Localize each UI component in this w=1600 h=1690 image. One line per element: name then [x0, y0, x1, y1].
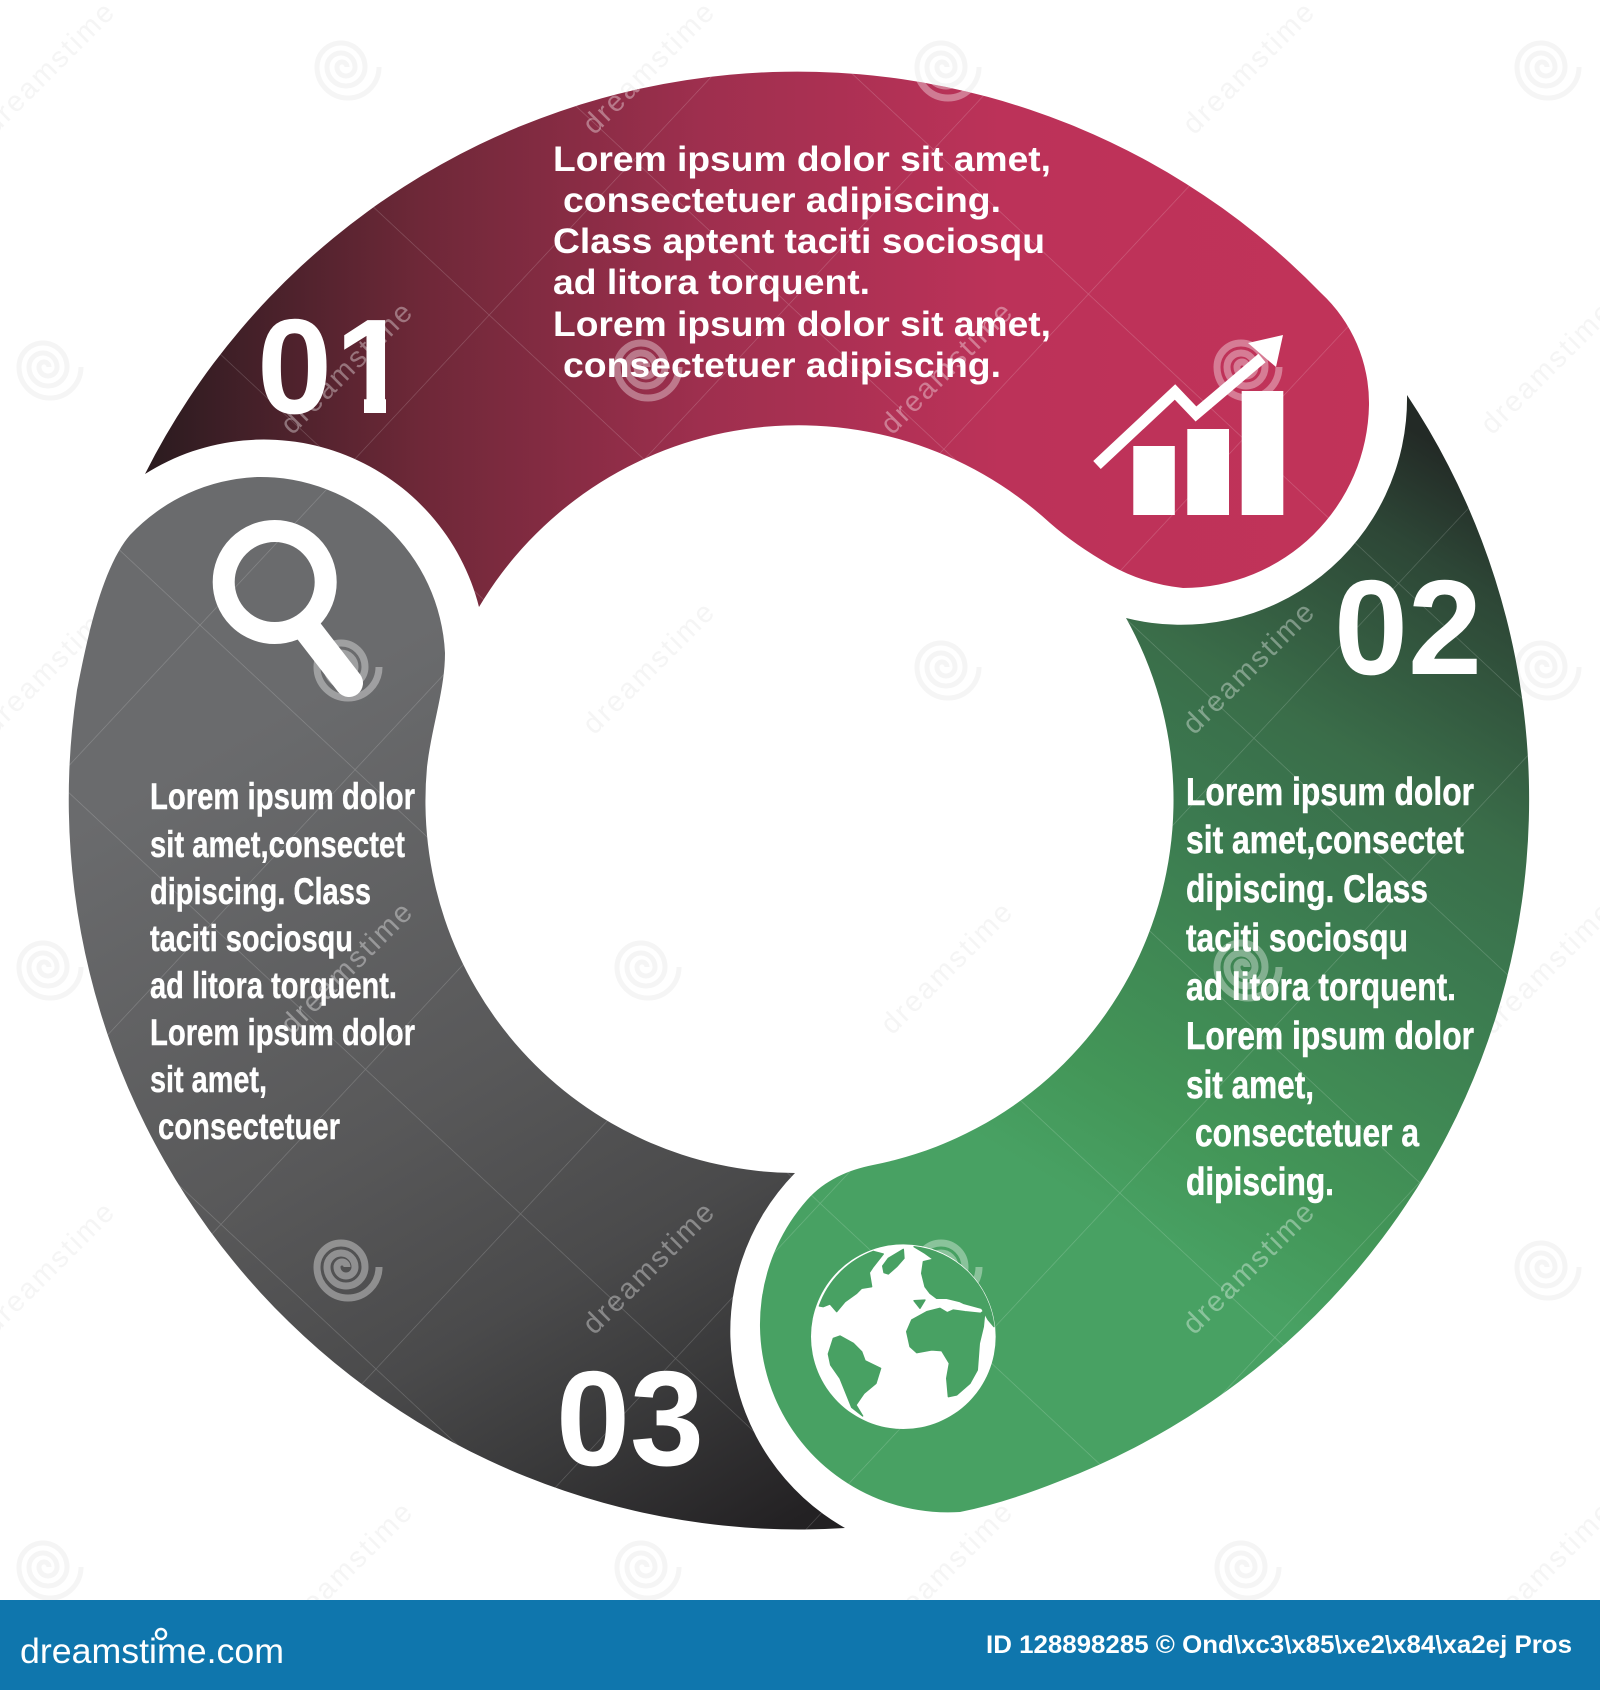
- text block: segment 01: Lorem ipsum dolor sit amet,: [553, 305, 1051, 344]
- text block: segment 03: sit amet,consectet: [150, 824, 405, 865]
- footer bar: [0, 1600, 1600, 1690]
- number 03: 03: [556, 1343, 704, 1494]
- text block: segment 02: dipiscing.: [1186, 1161, 1334, 1204]
- text block: segment 02: [1186, 771, 1474, 1204]
- icon: magnifying glass: [224, 531, 349, 683]
- watermark layer on ring segments: dreamstime: [275, 897, 419, 1041]
- watermark layer on ring segments: dreamstime: [577, 1197, 721, 1341]
- watermark layer on ring segments: dreamstime: [275, 297, 419, 441]
- text block: segment 03: [150, 776, 415, 1147]
- number 02: 02: [1334, 552, 1482, 703]
- text block: segment 01: consectetuer adipiscing.: [563, 346, 1001, 385]
- text block: segment 01: Lorem ipsum dolor sit amet,: [553, 140, 1051, 179]
- text block: segment 03: consectetuer: [158, 1106, 340, 1147]
- watermark layer on white background: dreamstime: [275, 1497, 419, 1641]
- text block: segment 02: Lorem ipsum dolor: [1186, 771, 1474, 814]
- watermark layer on white background: dreamstime: [1177, 1197, 1321, 1341]
- watermark layer on ring segments: [69, 74, 1528, 1530]
- watermark layer on white background: dreamstime: [577, 0, 721, 141]
- text block: segment 01: consectetuer adipiscing.: [563, 181, 1001, 220]
- text block: segment 03: ad litora torquent.: [150, 965, 397, 1006]
- text block: segment 03: sit amet,: [150, 1059, 267, 1100]
- text block: segment 01: Class aptent taciti sociosqu: [553, 222, 1045, 261]
- watermark layer on white background: dreamstime: [875, 897, 1019, 1041]
- text block: segment 03: Lorem ipsum dolor: [150, 1012, 415, 1053]
- text block: segment 03: dipiscing. Class: [150, 871, 371, 912]
- text block: segment 03: Lorem ipsum dolor: [150, 776, 415, 817]
- watermark layer on ring segments: dreamstime: [1177, 597, 1321, 741]
- footer logo text: dreamstime.com: [20, 1632, 284, 1671]
- ring segment 01: crimson: [145, 72, 1369, 607]
- ring segment 03: gray: [69, 477, 845, 1529]
- number 01: 01: [257, 291, 410, 442]
- watermark layer on ring segments: dreamstime: [875, 297, 1019, 441]
- watermark layer on ring segments: dreamstime: [577, 0, 721, 141]
- text block: segment 02: ad litora torquent.: [1186, 966, 1456, 1009]
- watermark layer on white background: dreamstime: [875, 1497, 1019, 1641]
- icon: rising bar chart with arrow: [1097, 335, 1283, 515]
- watermark layer on white background: dreamstime: [577, 597, 721, 741]
- text block: segment 02: sit amet,consectet: [1186, 819, 1464, 862]
- text block: segment 01: [553, 140, 1051, 385]
- text block: segment 03: taciti sociosqu: [150, 918, 353, 959]
- watermark layer on ring segments: dreamstime: [1177, 1197, 1321, 1341]
- icon: globe: [811, 1244, 996, 1429]
- text block: segment 02: Lorem ipsum dolor: [1186, 1015, 1474, 1058]
- watermark layer on white background: dreamstime: [1177, 0, 1321, 141]
- text block: segment 01: ad litora torquent.: [553, 263, 870, 302]
- ring segment 02: green: [760, 395, 1529, 1512]
- text block: segment 02: taciti sociosqu: [1186, 917, 1408, 960]
- text block: segment 02: sit amet,: [1186, 1064, 1314, 1107]
- text block: segment 02: consectetuer a: [1195, 1112, 1419, 1155]
- text block: segment 02: dipiscing. Class: [1186, 868, 1428, 911]
- footer image credit: ID 128898285 © Ond\xc3\x85\xe2\x84\xa2ej Pros: [986, 1631, 1572, 1659]
